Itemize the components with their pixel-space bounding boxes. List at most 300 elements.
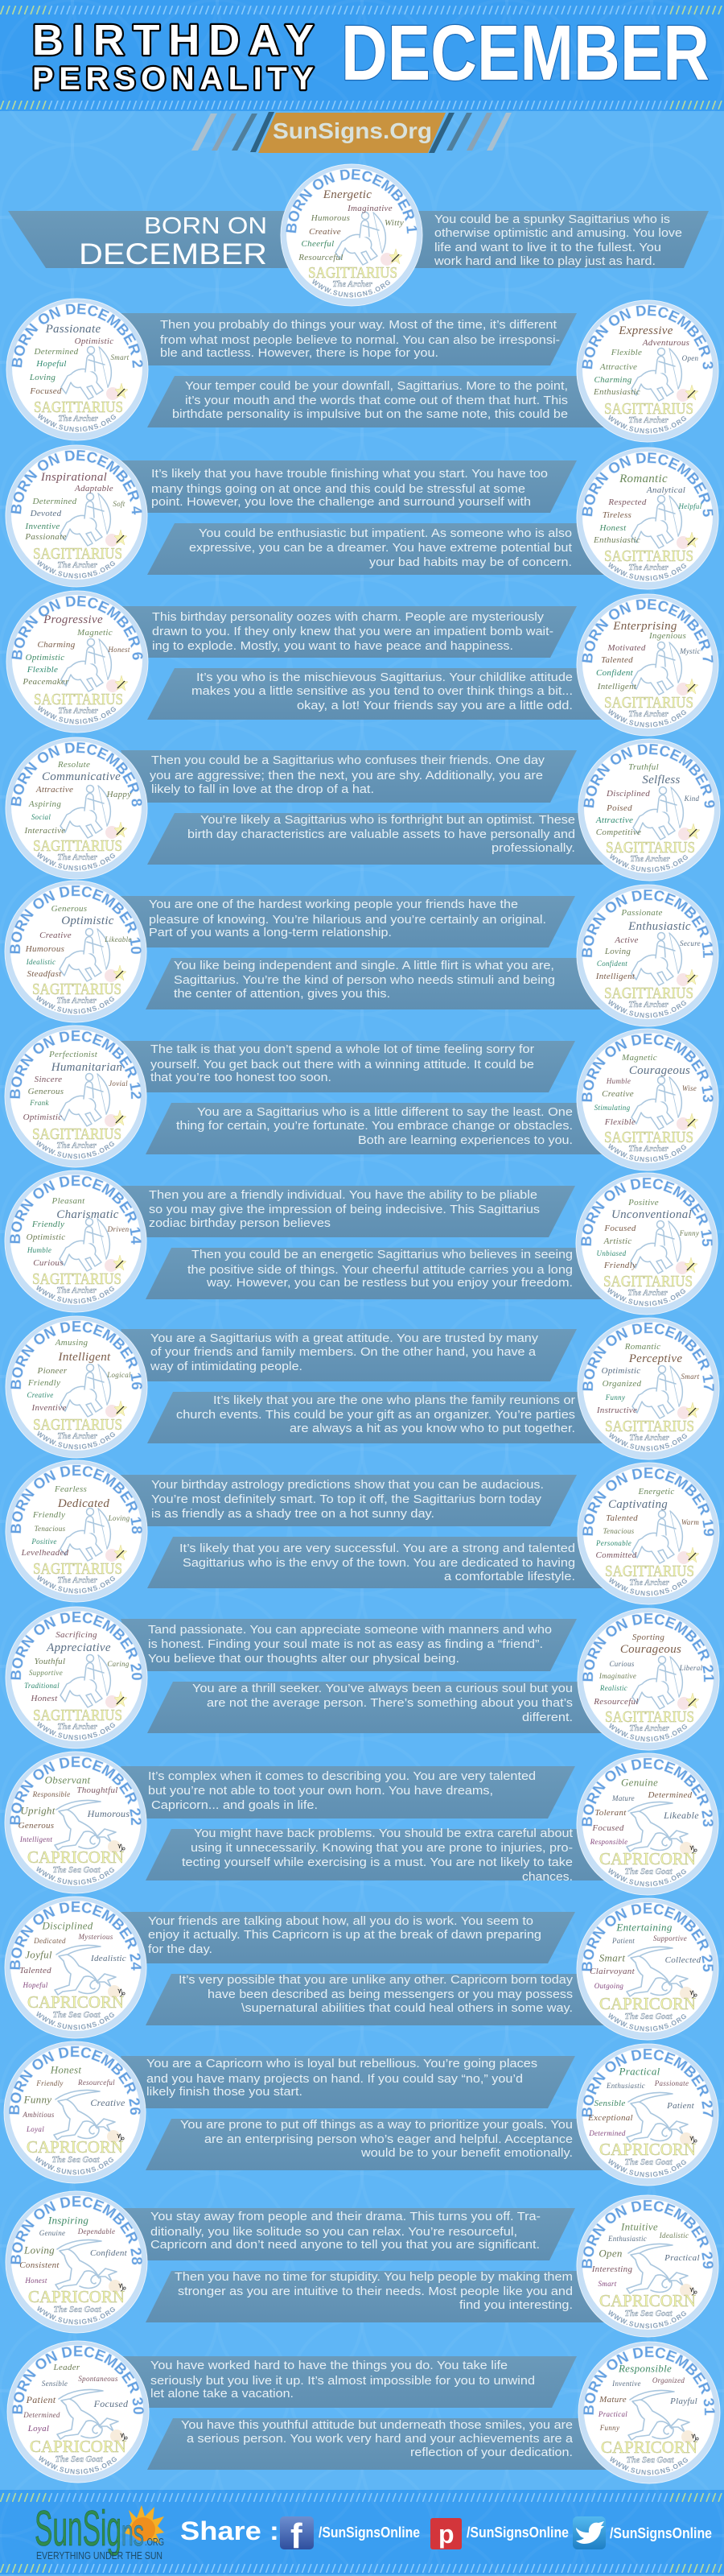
panel: December 12 text (121, 1041, 575, 1092)
medallion: December 13: Creative (602, 1089, 634, 1099)
panel: December 4 text: many things going on at once and this could be stressful at some (151, 483, 525, 496)
medallion: December 18: WWW.SUNSIGNS.ORG (37, 1575, 116, 1594)
medallion: December 20: Sacrificing (56, 1630, 97, 1640)
medallion: December 17: BORN ON DECEMBER 17 (582, 1322, 714, 1391)
medallion: December 22: Humorous (87, 1808, 130, 1819)
panel: December 9 text: You’re likely a Sagittarius who is forthright but an optimist. These (200, 814, 575, 827)
medallion: December 30: Patient (26, 2394, 56, 2405)
medallion: December 29: BORN ON DECEMBER 29 (578, 2197, 717, 2269)
medallion: December 16: WWW.SUNSIGNS.ORG (37, 1431, 116, 1449)
medallion: December 27: Practical (618, 2066, 660, 2077)
medallion: December 13: WWW.SUNSIGNS.ORG (608, 1143, 687, 1162)
medallion: December 4: Passionate (24, 532, 67, 542)
medallion: December 23: Genuine (621, 1776, 658, 1789)
medallion: December 15: Friendly (603, 1261, 636, 1270)
panel: December 17 text: It’s likely that you are the one who plans the family reunions or (213, 1394, 575, 1407)
medallion: December 31 (578, 2341, 721, 2484)
medallion: December 21: Realistic (599, 1684, 627, 1692)
panel: December 11 text (146, 958, 619, 1009)
medallion: December 31: Organized (652, 2376, 685, 2384)
panel: December 31 text: a serious person. You work very hard and your achievements are a (187, 2433, 574, 2446)
medallion: December 14: BORN ON DECEMBER 14 (10, 1175, 142, 1245)
medallion: December 16: The Archer (57, 1432, 98, 1441)
medallion: December 6 (6, 591, 148, 733)
medallion: December 28: Confident (90, 2248, 128, 2258)
intro text (434, 213, 682, 268)
panel: December 21 text: You are a thrill seeker. You’ve always been a curious soul but you (192, 1682, 573, 1695)
icon: facebook: f (290, 2516, 302, 2556)
medallion: December 9: Kind (684, 795, 700, 803)
panel: December 21 text: are not the average person. There’s something about you that’s (207, 1697, 573, 1710)
panel: December 19 text: a comfortable lifestyle. (444, 1571, 575, 1583)
medallion: December 3: Flexible (611, 348, 642, 357)
medallion: December 22: Intelligent (19, 1835, 52, 1843)
panel: December 29 text: Then you have no time for stupidity. You help people by making them (175, 2271, 573, 2284)
medallion: December 13: Humble (606, 1077, 631, 1085)
panel: December 5 text: your bad habits may be of concern. (369, 556, 572, 569)
medallion: December 1: Resourceful (298, 253, 343, 262)
panel: December 24 text: Your friends are talking about how, all you do is work. You seem to (148, 1915, 533, 1928)
panel: December 16 text: way of intimidating people. (150, 1360, 302, 1373)
medallion: December 22: CAPRICORN (27, 1847, 124, 1867)
medallion: December 25: The Sea Goat (625, 2013, 673, 2021)
medallion: December 29: Idealistic (659, 2231, 689, 2240)
panel: December 20 text: Tand passionate. You can appreciate someone with manners and who (148, 1624, 552, 1637)
medallion: December 5: SAGITTARIUS (604, 547, 693, 565)
medallion: December 18: Fearless (54, 1484, 87, 1494)
panel: December 24 text: enjoy it actually. This Capricorn is up at the break of dawn preparing (148, 1929, 541, 1942)
panel: December 6 text: This birthday personality oozes with charm. People are mysteriously (152, 611, 545, 624)
medallion: December 5: The Archer (628, 564, 669, 572)
medallion: December 9: WWW.SUNSIGNS.ORG (610, 853, 689, 873)
medallion: December 10 (5, 881, 146, 1022)
panel: December 16 text: of your friends and family members. On the other hand, you have a (150, 1346, 537, 1359)
medallion: December 2: Hopeful (35, 359, 67, 369)
medallion: December 19 (578, 1462, 719, 1605)
panel: December 12 text: that you’re too honest too soon. (150, 1071, 331, 1084)
medallion: December 3: The Archer (628, 416, 669, 425)
medallion: December 8: Resolute (57, 760, 90, 770)
panel: December 17 text: church events. This could be your gift as an organizer. You’re parties (176, 1409, 575, 1422)
medallion: December 31: CAPRICORN (601, 2438, 697, 2457)
medallion: December 3: Expressive (618, 324, 673, 337)
medallion: December 9: The Archer (630, 855, 671, 864)
panel: December 29 text (146, 2271, 619, 2322)
medallion: December 25: WWW.SUNSIGNS.ORG (607, 2012, 689, 2033)
panel: December 3 text: Your temper could be your downfall, Sagittarius. More to the point, (185, 380, 568, 393)
medallion: December 10: Creative (39, 931, 72, 940)
medallion: December 4 (5, 444, 148, 588)
medallion: December 12: Perfectionist (48, 1050, 98, 1059)
medallion: December 18: Loving (108, 1514, 130, 1522)
medallion: December 4: Soft (113, 500, 125, 508)
panel: December 25 text (146, 1974, 619, 2025)
medallion: December 30: Focused (93, 2398, 129, 2409)
medallion: December 17: WWW.SUNSIGNS.ORG (609, 1433, 687, 1451)
heading: born on december: DECEMBER (79, 237, 267, 270)
intro text: otherwise optimistic and amusing. You love (434, 227, 682, 240)
medallion: December 27 (576, 2043, 719, 2186)
medallion: December 17: Smart (681, 1373, 700, 1381)
medallion: December 2: Loving (29, 373, 56, 382)
medallion: December 26: BORN ON DECEMBER 26 (6, 2043, 144, 2116)
medallion: December 7: Confident (596, 668, 634, 678)
medallion: December 28: Dependable (77, 2227, 115, 2235)
panel: December 14 text (121, 1186, 575, 1237)
panel: December 4 text: point. However, you love the challenge and surround yourself with (151, 496, 531, 509)
panel: December 14 text: zodiac birthday person believes (149, 1217, 331, 1230)
medallion: December 8: Social (31, 813, 51, 821)
medallion: December 8: WWW.SUNSIGNS.ORG (37, 852, 116, 871)
panel: December 2 text (121, 313, 577, 365)
medallion: December 14: The Archer (56, 1286, 97, 1295)
medallion: December 18: Tenacious (35, 1525, 66, 1533)
medallion: December 27: Passionate (654, 2079, 689, 2087)
medallion: December 4: Determined (32, 497, 77, 506)
panel: December 28 text: You stay away from people and their drama. This turns you off. Tra- (150, 2211, 541, 2223)
medallion: December 29: Enthusiastic (607, 2235, 647, 2243)
medallion: December 20: The Archer (57, 1723, 98, 1732)
panel: December 27 text (146, 2119, 619, 2170)
medallion: December 3: WWW.SUNSIGNS.ORG (608, 415, 687, 433)
medallion: December 30: Loyal (27, 2424, 49, 2434)
medallion: December 1: Cheerful (302, 239, 334, 249)
medallion: December 25: Clairvoyant (590, 1967, 636, 1976)
medallion: December 14: Optimistic (27, 1232, 65, 1242)
medallion: December 23: Responsible (590, 1838, 627, 1846)
medallion: December 8: Aspiring (28, 799, 61, 809)
panel: December 26 text: You are a Capricorn who is loyal but rebellious. You’re going places (146, 2058, 537, 2070)
medallion: December 24: WWW.SUNSIGNS.ORG (35, 2010, 117, 2031)
medallion: December 24: Hopeful (22, 1981, 48, 1989)
panel: December 29 text: find you interesting. (459, 2299, 573, 2312)
medallion: December 9: Selfless (642, 774, 681, 786)
medallion: December 16: Intelligent (58, 1351, 111, 1364)
medallion: December 28 (5, 2191, 148, 2333)
medallion: December 20 (5, 1607, 148, 1748)
medallion: December 5: Respected (607, 497, 647, 507)
medallion: December 1: Energetic (323, 188, 372, 201)
medallion: December 2: Determined (34, 347, 79, 357)
panel: December 2 text: Then you probably do things your way. Most of the time, it’s different (160, 319, 557, 332)
facebook handle: /SunSignsOnline (319, 2524, 420, 2541)
medallion: December 18: BORN ON DECEMBER 18 (10, 1465, 142, 1534)
medallion: December 1: The Archer (332, 280, 373, 289)
medallion: December 21 (578, 1608, 719, 1750)
medallion: December 10: SAGITTARIUS (32, 980, 121, 998)
medallion: December 20: Caring (107, 1660, 130, 1668)
medallion: December 31: Responsible (618, 2362, 672, 2375)
medallion: December 15: Funny (679, 1229, 699, 1237)
medallion: December 11 (576, 884, 719, 1027)
footer logo: SunSigns.org: EVERYTHING UNDER THE SUN (36, 2549, 162, 2562)
panel: December 23 text: using it unnecessarily. Knowing that you are prone to injuries, pro- (191, 1842, 573, 1855)
medallion: December 27: Determined (588, 2129, 626, 2137)
panel: December 22 text: but you’re not able to toot your own horn. You have dreams, (148, 1785, 493, 1798)
medallion: December 24: Joyful (25, 1948, 52, 1961)
medallion: December 13: Flexible (604, 1117, 636, 1127)
medallion: December 14: Humble (27, 1246, 51, 1254)
medallion: December 10: The Archer (56, 997, 97, 1005)
panel: December 6 text (121, 606, 577, 658)
medallion: December 28: BORN ON DECEMBER 28 (7, 2193, 146, 2265)
medallion: December 31: Playful (669, 2396, 697, 2406)
medallion: December 17: Organized (603, 1379, 642, 1389)
heading: born on december: BORN ON (144, 213, 267, 239)
twitter handle: /SunSignsOnline (610, 2525, 712, 2541)
medallion: December 26: WWW.SUNSIGNS.ORG (34, 2155, 116, 2176)
footer logo: SunSigns.org: .ORG (145, 2536, 164, 2548)
medallion: December 8: The Archer (57, 853, 98, 862)
panel: December 6 text: ing to explode. Mostly, you want to have peace and happiness. (152, 640, 513, 653)
panel: December 25 text: It’s very possible that you are unlike any other. Capricorn born today (179, 1974, 574, 1987)
medallion: December 7: BORN ON DECEMBER 7 (582, 599, 714, 663)
medallion: December 5: Honest (599, 523, 627, 533)
panel: December 14 text: Then you are a friendly individual. You have the ability to be pliable (149, 1189, 537, 1202)
panel: December 15 text: the positive side of things. Your cheerful attitude carries you a long (187, 1264, 573, 1277)
medallion: December 26: The Sea Goat (52, 2156, 101, 2165)
medallion: December 29: Open (599, 2248, 623, 2259)
medallion: December 20: Appreciative (46, 1641, 111, 1654)
medallion: December 16: BORN ON DECEMBER 16 (10, 1320, 142, 1389)
medallion: December 8: BORN ON DECEMBER 8 (10, 742, 142, 807)
medallion: December 15: SAGITTARIUS (603, 1273, 693, 1290)
medallion: December 9: Competitive (596, 828, 641, 837)
medallion: December 16: Logical (106, 1371, 131, 1379)
panel: December 3 text (147, 376, 619, 427)
medallion: December 19: Captivating (608, 1498, 668, 1511)
medallion: December 26: Funny (23, 2093, 51, 2106)
panel: December 8 text: you are aggressive; then the next, you are shy. Additionally, you are (150, 770, 543, 782)
medallion: December 7: Enterprising (612, 620, 677, 633)
panel: December 31 text: reflection of your dedication. (410, 2446, 573, 2459)
medallion: December 16: Inventive (31, 1403, 67, 1413)
medallion: December 25: Patient (611, 1937, 635, 1945)
medallion: December 4: BORN ON DECEMBER 4 (10, 449, 142, 515)
medallion: December 15: Positive (627, 1198, 659, 1208)
medallion: December 12: Optimistic (23, 1113, 62, 1122)
medallion: December 2: WWW.SUNSIGNS.ORG (38, 414, 116, 431)
medallion: December 6: Flexible (27, 665, 58, 675)
medallion: December 27: BORN ON DECEMBER 27 (578, 2046, 717, 2118)
medallion: December 5: Romantic (619, 473, 668, 485)
medallion: December 21: Curious (609, 1660, 635, 1668)
title: Birthday Personality: BIRTHDAY (32, 16, 314, 64)
medallion: December 8: Communicative (42, 770, 121, 783)
panel: December 19 text: It’s likely that you are very successful. You are a strong and talented (179, 1542, 575, 1555)
panel: December 11 text: You like being independent and single. A little flirt is what you are, (174, 960, 554, 972)
panel: December 16 text: You are a Sagittarius with a great attitude. You are trusted by many (150, 1332, 539, 1345)
medallion: December 24: CAPRICORN (27, 1992, 124, 2012)
medallion: December 24: Idealistic (90, 1954, 126, 1963)
medallion: December 30: The Sea Goat (56, 2455, 104, 2464)
medallion: December 14: Pleasant (51, 1196, 85, 1206)
medallion: December 15: WWW.SUNSIGNS.ORG (607, 1288, 685, 1306)
panel: December 29 text: stronger as you are intuitive to their needs. Most people like you and (178, 2285, 573, 2298)
medallion: December 23: Determined (648, 1790, 693, 1800)
medallion: December 20: Traditional (24, 1682, 60, 1690)
medallion: December 15: Unbiased (597, 1249, 627, 1257)
medallion: December 19: Energetic (637, 1487, 675, 1496)
medallion: December 2: SAGITTARIUS (34, 398, 123, 416)
medallion: December 1: SAGITTARIUS (308, 264, 397, 282)
medallion: December 15: Artistic (603, 1236, 631, 1246)
medallion: December 18: Positive (31, 1538, 57, 1546)
medallion: December 31: Funny (599, 2424, 619, 2432)
medallion: December 22: Responsible (32, 1790, 70, 1798)
panel: December 13 text (146, 1103, 619, 1154)
medallion: December 29 (576, 2194, 719, 2338)
panel: December 28 text (121, 2208, 575, 2260)
panel: December 3 text: birthdate personality is impulsive but on the same note, this could be (172, 408, 568, 421)
medallion: December 19: Personable (595, 1539, 631, 1547)
medallion: December 20: Youthful (35, 1657, 65, 1666)
medallion: December 17: Optimistic (602, 1366, 640, 1376)
medallion: December 19: Committed (596, 1550, 637, 1560)
medallion: December 5: Enthusiastic (593, 535, 640, 545)
logo ribbon: SunSigns.Org: SunSigns.Org (273, 118, 432, 143)
panel: December 24 text: for the day. (148, 1943, 212, 1956)
panel: December 8 text: Then you could be a Sagittarius who confuses their friends. One day (151, 754, 545, 767)
medallion: December 9: Truthful (628, 762, 659, 772)
panel: December 22 text: It’s complex when it comes to describing you. You are very talented (148, 1770, 536, 1783)
medallion: December 22: Upright (20, 1805, 56, 1816)
panel: December 16 text (121, 1329, 577, 1381)
medallion: December 22: BORN ON DECEMBER 22 (6, 1753, 145, 1826)
medallion: December 1: BORN ON DECEMBER 1 (286, 169, 417, 233)
medallion: December 20: Honest (31, 1694, 58, 1703)
medallion: December 7: SAGITTARIUS (604, 694, 693, 712)
panel: December 3 text: it’s your mouth and the words that come out of them that hurt. This (185, 394, 568, 407)
medallion: December 17 (578, 1317, 719, 1460)
panel: December 30 text: You have worked hard to have the things you do. You take life (150, 2359, 508, 2372)
medallion: December 13: Magnetic (621, 1053, 657, 1063)
panel: December 25 text: have been described as being messengers or you may possess (208, 1988, 573, 2001)
medallion: December 21: Sporting (632, 1633, 664, 1642)
medallion: December 29: Smart (598, 2280, 617, 2288)
medallion: December 9: Disciplined (606, 789, 650, 799)
panel: December 17 text (147, 1392, 619, 1443)
panel: December 31 text (147, 2418, 619, 2470)
panel: December 27 text: would be to your benefit emotionally. (360, 2147, 573, 2160)
panel: December 26 text (121, 2056, 575, 2108)
medallion: December 12: Generous (28, 1087, 64, 1096)
medallion: December 8: SAGITTARIUS (33, 837, 122, 855)
medallion: December 6: Honest (107, 646, 130, 654)
medallion: December 3: Enthusiastic (593, 387, 640, 397)
medallion: December 10: Optimistic (61, 914, 114, 927)
medallion: December 24: Dedicated (33, 1937, 66, 1945)
medallion: December 6: BORN ON DECEMBER 6 (11, 596, 143, 660)
medallion: December 1: Humorous (311, 213, 350, 223)
medallion: December 26: Creative (90, 2097, 125, 2108)
medallion: December 13: Courageous (629, 1064, 690, 1077)
medallion: December 11: Passionate (620, 908, 663, 918)
medallion: December 25: Entertaining (615, 1921, 673, 1934)
medallion: December 31: The Sea Goat (627, 2456, 675, 2465)
medallion: December 17: Romantic (624, 1342, 660, 1352)
medallion: December 8: Happy (106, 790, 131, 799)
medallion: December 3: Open (682, 354, 699, 362)
medallion: December 5: WWW.SUNSIGNS.ORG (608, 562, 687, 581)
medallion: December 9: SAGITTARIUS (606, 839, 695, 857)
medallion: December 10: Likeable (104, 935, 132, 943)
medallion: December 11: WWW.SUNSIGNS.ORG (608, 1000, 687, 1018)
medallion: December 24: BORN ON DECEMBER 24 (6, 1898, 145, 1971)
medallion: December 10: Generous (51, 904, 87, 914)
panel: December 13 text: thing for certain, you’re fortunate. You embrace change or obstacles. (176, 1120, 573, 1133)
medallion: December 16: Creative (27, 1391, 54, 1399)
medallion: December 3: BORN ON DECEMBER 3 (582, 304, 714, 369)
panel: December 24 text (121, 1912, 575, 1963)
medallion: December 12: WWW.SUNSIGNS.ORG (36, 1140, 114, 1159)
heading: born on december (79, 213, 267, 270)
medallion: December 29: The Sea Goat (625, 2310, 673, 2318)
medallion: December 2: The Archer (58, 415, 99, 423)
icon: twitter (573, 2516, 606, 2549)
medallion: December 14: Curious (33, 1258, 64, 1268)
medallion: December 29: Interesting (591, 2264, 632, 2274)
medallion: December 16 (5, 1315, 148, 1459)
medallion: December 11: The Archer (628, 1001, 669, 1009)
medallion: December 26: Resourceful (77, 2079, 115, 2087)
panel: December 18 text: Your birthday astrology predictions show that you can be audacious. (151, 1479, 544, 1492)
medallion: December 23: Tolerant (594, 1808, 627, 1818)
medallion: December 11: Secure (680, 939, 701, 947)
medallion: December 5 (576, 448, 719, 589)
medallion: December 22 (5, 1752, 146, 1893)
medallion: December 26: Friendly (35, 2079, 64, 2087)
panel: December 9 text: birth day characteristics are valuable assets to have personally and (187, 828, 575, 841)
medallion: December 14: Driven (107, 1225, 130, 1233)
medallion: December 13: BORN ON DECEMBER 13 (582, 1034, 714, 1103)
panel: December 20 text (121, 1619, 577, 1671)
panel: December 8 text (121, 750, 577, 803)
icon: pinterest: p (438, 2520, 455, 2549)
medallion: December 18: SAGITTARIUS (33, 1560, 122, 1578)
panel: December 19 text: Sagittarius who is the envy of the town. You are dedicated to having (183, 1557, 575, 1570)
medallion: December 2: Passionate (45, 323, 101, 336)
medallion: December 6: Optimistic (26, 653, 64, 663)
medallion: December 6: Peacemaker (22, 677, 69, 687)
medallion: December 12: SAGITTARIUS (32, 1125, 121, 1143)
medallion: December 31: WWW.SUNSIGNS.ORG (608, 2455, 690, 2476)
medallion: December 3: SAGITTARIUS (604, 400, 693, 418)
medallion: December 12: Humanitarian (51, 1061, 122, 1074)
panel: December 27 text: are an enterprising person who’s eager and helpful. Acceptance (204, 2133, 573, 2146)
medallion: December 3: Charming (594, 375, 632, 385)
medallion: December 5: Tireless (603, 510, 631, 520)
panel: December 12 text: The talk is that you don’t spend a whole lot of time feeling sorry for (150, 1043, 534, 1056)
medallion: December 25: Supportive (653, 1934, 687, 1942)
medallion: December 20: WWW.SUNSIGNS.ORG (37, 1721, 116, 1740)
medallion: December 14: Friendly (31, 1220, 64, 1229)
medallion: December 18: The Archer (57, 1576, 98, 1585)
medallion: December 6: Charming (37, 640, 76, 650)
medallion: December 12: The Archer (56, 1141, 97, 1150)
panel: December 7 text: okay, a lot! Your friends say you are a little odd. (297, 700, 573, 712)
medallion: December 9: Poised (606, 803, 632, 813)
medallion: December 30: Determined (23, 2411, 60, 2419)
panel: December 9 text: professionally. (492, 842, 575, 855)
panel: December 5 text: You could be enthusiastic but impatient. As someone who is also (199, 527, 572, 540)
panel: December 13 text: You are a Sagittarius who is a little different to say the least. One (197, 1106, 573, 1119)
medallion: December 5: Helpful (677, 502, 702, 510)
medallion: December 29: Intuitive (620, 2220, 658, 2233)
medallion: December 8 (5, 737, 148, 879)
medallion: December 5: BORN ON DECEMBER 5 (582, 452, 714, 517)
medallion: December 4: Inspirational (40, 471, 107, 484)
